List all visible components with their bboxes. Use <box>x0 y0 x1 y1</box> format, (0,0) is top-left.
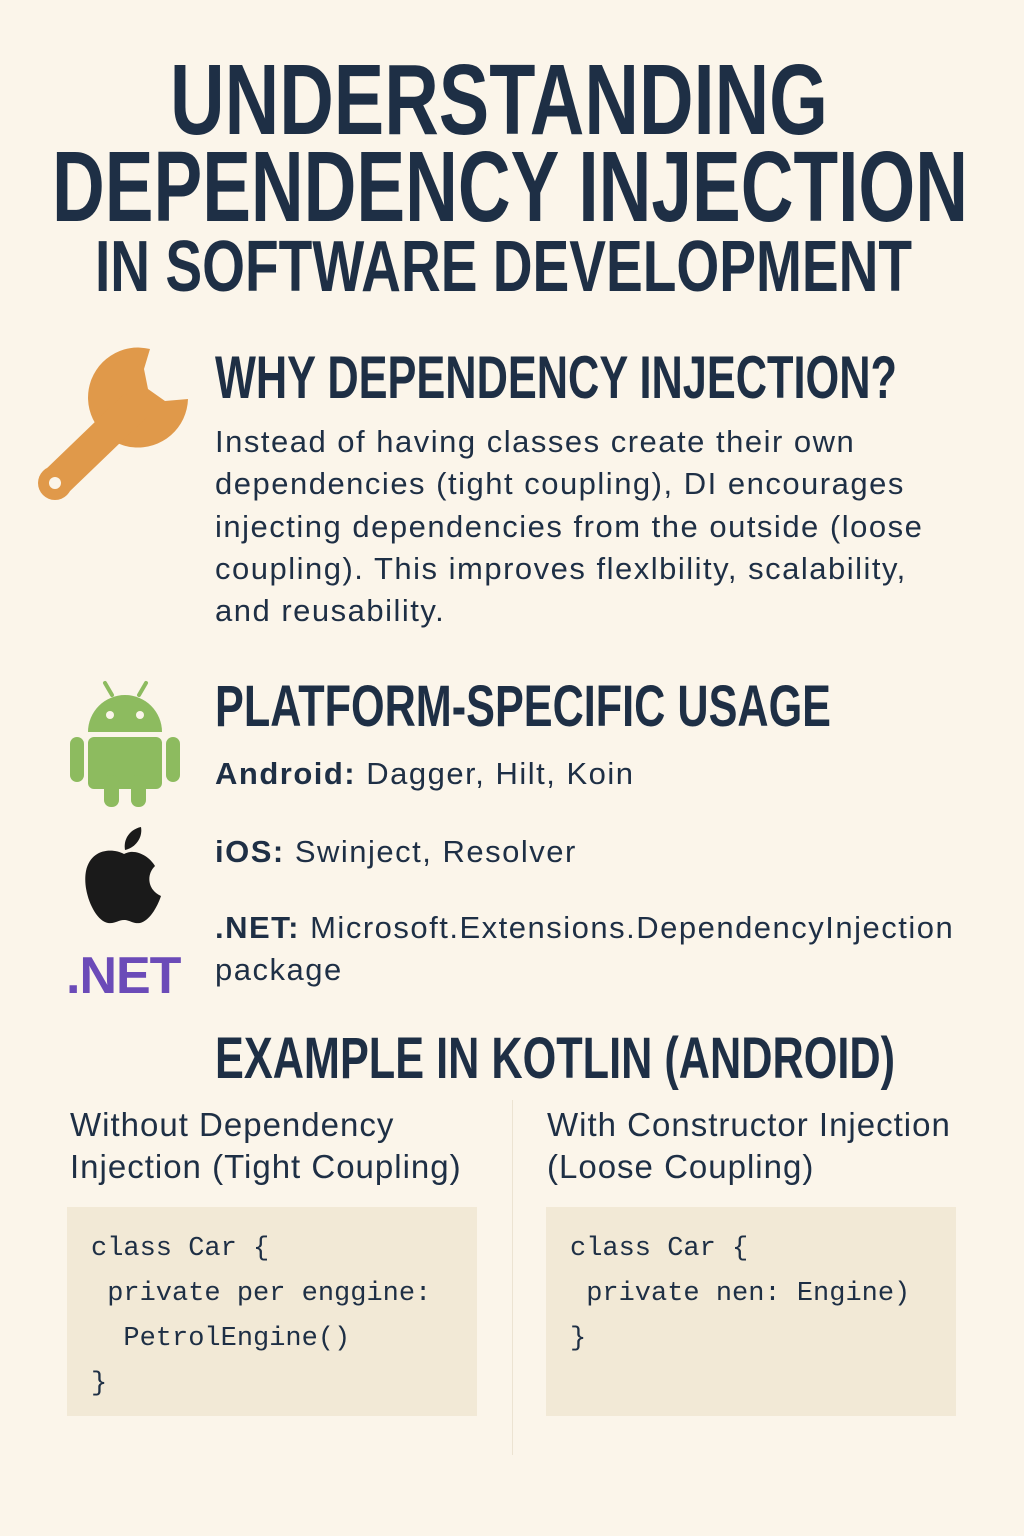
subheading: without <box>70 1106 462 1185</box>
title <box>52 44 968 307</box>
code block: tight <box>67 1207 477 1416</box>
text: why body: Instead of having classes create their own <box>215 424 855 459</box>
subheading: without: Without Dependency <box>70 1106 394 1143</box>
subheading: with: (Loose Coupling) <box>547 1148 814 1185</box>
icon: apple <box>85 827 161 924</box>
code block: tight: PetrolEngine() <box>123 1324 350 1354</box>
text: dotnet: package <box>215 952 343 987</box>
icon: wrench <box>38 348 188 500</box>
heading: platform: PLATFORM-SPECIFIC USAGE <box>215 674 831 739</box>
code block: tight: } <box>91 1369 107 1399</box>
code block: loose: class Car { <box>570 1234 748 1264</box>
panel: with DI <box>546 1106 956 1416</box>
text: why body: dependencies (tight coupling), DI encourages <box>215 466 905 501</box>
code block: tight: private per enggine: <box>107 1279 431 1309</box>
text: why body <box>215 424 923 628</box>
text: dotnet: .NET: Microsoft.Extensions.DependencyInjection <box>215 910 954 945</box>
text: why body: coupling). This improves flexlbility, scalability, <box>215 551 907 586</box>
subheading: with <box>547 1106 951 1185</box>
title: UNDERSTANDING <box>170 44 828 156</box>
panel: without DI <box>67 1106 477 1416</box>
text: why body: injecting dependencies from the outside (loose <box>215 509 923 544</box>
subheading: with: With Constructor Injection <box>547 1106 951 1143</box>
code block: loose: } <box>570 1324 586 1354</box>
text: android: Android: Dagger, Hilt, Koin <box>215 756 634 791</box>
code block: tight: class Car { <box>91 1234 269 1264</box>
subheading: without: Injection (Tight Coupling) <box>70 1148 462 1185</box>
text: dotnet <box>215 910 954 987</box>
icon: .NET: .NET <box>66 947 180 1005</box>
icon: android <box>70 680 180 807</box>
code block: loose: private nen: Engine) <box>586 1279 910 1309</box>
code block: loose <box>546 1207 956 1416</box>
text: ios: iOS: Swinject, Resolver <box>215 834 577 869</box>
text: why body: and reusability. <box>215 593 445 628</box>
